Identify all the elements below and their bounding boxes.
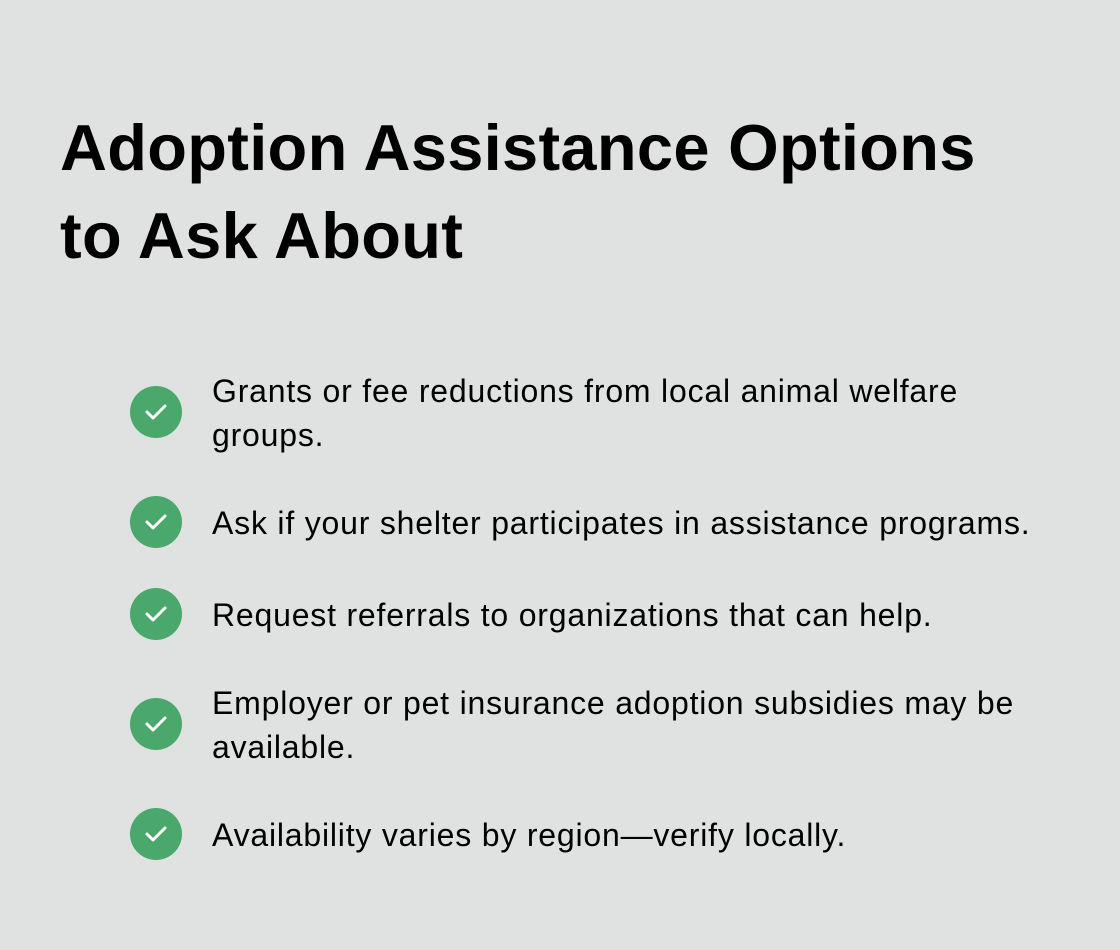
icon: check xyxy=(130,386,182,438)
text: Grants or fee reductions from local animal welfare xyxy=(212,373,958,409)
item 5 xyxy=(130,808,846,860)
text xyxy=(212,373,958,453)
text: groups. xyxy=(212,417,324,453)
icon: check xyxy=(130,808,182,860)
text: available. xyxy=(212,729,355,765)
icon: check xyxy=(130,496,182,548)
icon: check xyxy=(130,588,182,640)
item 1 xyxy=(130,373,958,453)
text xyxy=(212,685,1014,765)
title: to Ask About xyxy=(60,199,463,272)
text: Request referrals to organizations that can help. xyxy=(212,597,932,633)
item 3 xyxy=(130,588,932,640)
icon: check xyxy=(130,698,182,750)
text: Availability varies by region—verify locally. xyxy=(212,817,846,853)
text: Employer or pet insurance adoption subsidies may be xyxy=(212,685,1014,721)
title xyxy=(60,111,976,272)
item 2 xyxy=(130,496,1030,548)
title: Adoption Assistance Options xyxy=(60,111,976,184)
item 4 xyxy=(130,685,1014,765)
text: Ask if your shelter participates in assistance programs. xyxy=(212,505,1030,541)
